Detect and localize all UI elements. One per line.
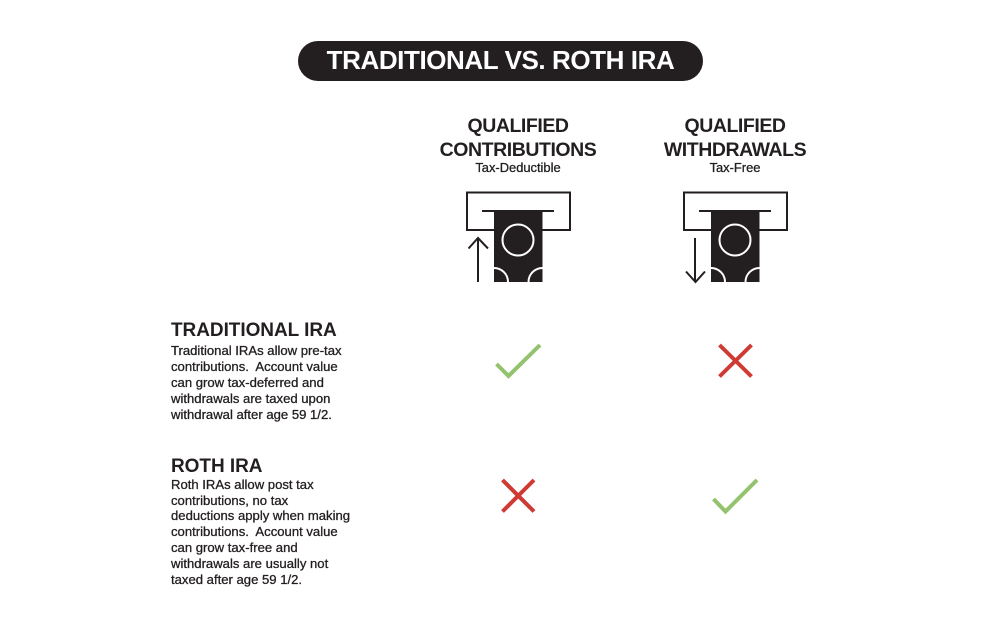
icon: green check, traditional contributions <box>495 344 542 379</box>
text: traditional IRA description: withdrawals are taxed upon <box>171 391 330 406</box>
text: Roth IRA description: taxed after age 59 1/2. <box>171 572 302 587</box>
column heading: qualified withdrawals: QUALIFIED <box>684 115 786 137</box>
icon: withdrawal bill going down <box>683 192 788 284</box>
text: Roth IRA description: deductions apply when making <box>171 508 350 523</box>
heading: Roth IRA: ROTH IRA <box>171 456 262 477</box>
title <box>298 41 703 81</box>
title: TRADITIONAL VS. ROTH IRA <box>327 45 674 75</box>
text: Roth IRA description: contributions. Account value <box>171 524 338 539</box>
text: traditional IRA description: can grow tax-deferred and <box>171 375 324 390</box>
text: traditional IRA description <box>170 343 342 422</box>
column subheading: tax-free: Tax-Free <box>710 160 760 175</box>
text: traditional IRA description: Traditional IRAs allow pre-tax <box>171 343 342 358</box>
icon: red cross, Roth contributions <box>501 478 536 513</box>
icon: green check, Roth withdrawals <box>712 478 758 514</box>
icon: red cross, traditional withdrawals <box>718 344 753 378</box>
text: traditional IRA description: withdrawal after age 59 1/2. <box>171 407 332 422</box>
heading: traditional IRA: TRADITIONAL IRA <box>171 320 337 341</box>
column heading: qualified withdrawals <box>664 115 806 161</box>
column heading: qualified contributions: CONTRIBUTIONS <box>440 139 596 161</box>
column subheading: tax-deductible: Tax-Deductible <box>475 160 561 175</box>
text: Roth IRA description: withdrawals are usually not <box>171 556 328 571</box>
text: Roth IRA description <box>170 477 350 587</box>
column heading: qualified withdrawals: WITHDRAWALS <box>664 139 806 161</box>
text: Roth IRA description: can grow tax-free and <box>171 540 298 555</box>
column heading: qualified contributions: QUALIFIED <box>467 115 569 137</box>
text: traditional IRA description: contributions. Account value <box>171 359 338 374</box>
text: Roth IRA description: Roth IRAs allow post tax <box>171 477 314 492</box>
text: Roth IRA description: contributions, no tax <box>171 492 288 508</box>
icon: contribution bill going up <box>466 192 571 282</box>
column heading: qualified contributions <box>440 115 596 161</box>
